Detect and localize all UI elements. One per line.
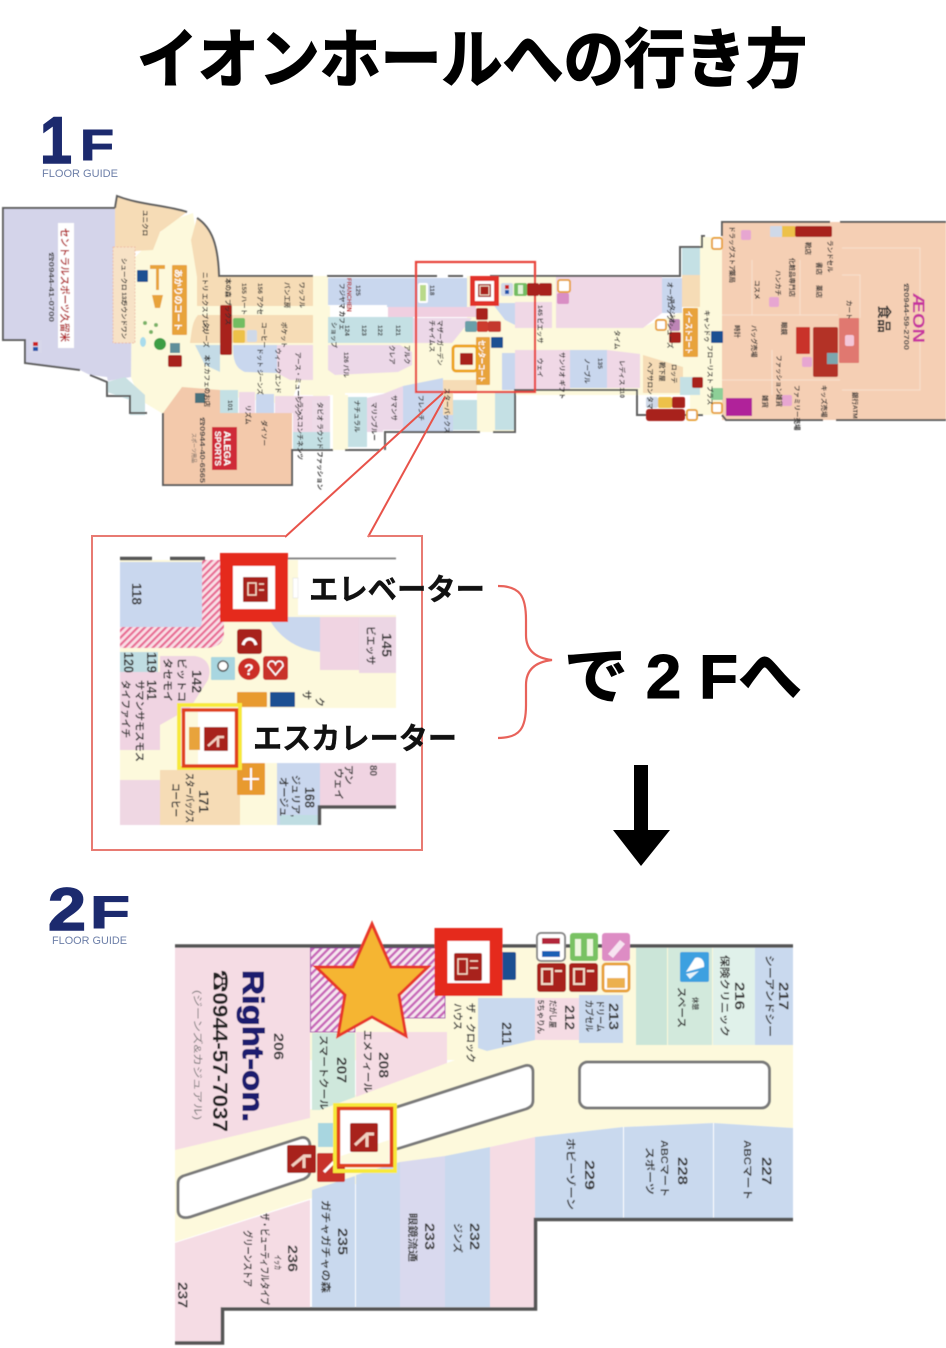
tiny shop labels 1F: 101 [226,400,233,411]
tiny shop labels 1F: ファッション雑貨 [775,355,784,408]
tiny shop labels 1F: 化粧品専門店 [788,258,797,298]
tiny shop labels 1F: 薬局 [728,270,737,284]
shop labels 2F: 237 [175,1282,191,1308]
store: rest space [636,948,793,1045]
shop labels 2F: ザ・クロック [464,1003,476,1063]
icon: escalator 1F [453,346,477,371]
tiny shop labels 1F: キッズ売場 [820,385,829,418]
shop labels 2F: 眼鏡流通 [406,1213,419,1262]
store label: right-on [191,970,287,1132]
star: destination [316,924,428,1036]
corridor base [131,213,722,415]
tiny shop labels 1F: アース・ミュージック [294,352,303,416]
shop labels inset: アン [342,765,354,785]
icon: lower escalator [287,1145,316,1173]
tiny shop labels 1F: レディス 110 [618,360,627,398]
logo: 2F floor guide: 2 [48,876,86,943]
tiny shop labels 1F: ドラッグストア [728,226,737,272]
store: 212 [535,998,579,1040]
shop labels inset: 118 [129,583,145,605]
tiny shop labels 1F: 雑貨 [761,395,770,408]
tiny shop labels 1F: 銀行ATM [851,392,860,419]
walls [175,946,793,1343]
icons: elevator 1F [472,278,496,304]
shop labels inset: 141 [144,680,160,700]
icon: elevator highlight [441,934,496,990]
shop labels 2F: イッカ [273,1255,282,1270]
tiny shop labels 1F: タリーズ [202,322,211,348]
stores: central blocks [328,278,387,305]
icon: heart [263,656,288,680]
logo: 1F floor guide [40,103,118,180]
tiny shop labels 1F: ドット ジーンズ [256,348,265,395]
tiny shop labels 1F: オーガニック シューズ [666,282,675,349]
tiny shop labels 1F: ワッフル [298,282,306,308]
store label: right-on: Right-on. [236,970,269,1122]
shop labels inset: ウェイ [332,768,344,800]
shop labels 2F: ガチャガチャの森 [319,1200,332,1293]
shop labels inset: ビットコ [175,658,188,702]
shop labels 2F: 207 [334,1057,350,1083]
shop labels 2F: ABCマート [741,1140,752,1200]
panel: zoomed inset frame [92,536,422,850]
tiny shop labels 1F: コスメ [753,280,761,300]
map: enlarged 1F elevator and escalator area [119,558,396,825]
label: alega sports: SPORTS [213,431,222,467]
shop labels 2F: エメフィール [361,1030,373,1093]
label: escalator: エスカレーター [253,723,457,756]
shop labels inset: 80 [367,765,378,777]
tiny shop labels 1F: チャイムス [428,320,436,352]
tiny shop labels 1F: フジヤマ カフェ [338,283,346,330]
map: 1F floor plan [3,196,946,491]
icon: escalator highlight [179,705,240,768]
shop labels inset: 145 [379,633,395,657]
icon: telephone [237,629,262,654]
shop labels 2F: 227 [759,1157,775,1185]
logo: 1F floor guide: 1 [40,103,72,177]
tiny shop labels 1F: ロッテ [670,364,678,384]
tiny shop labels 1F: ファミリー売場 [793,385,802,431]
void: atrium right [580,1062,770,1108]
store: alega sports [163,387,292,485]
store: 213 [579,995,623,1043]
logo: 2F floor guide [48,876,130,947]
shop labels 2F: だがし屋 [548,1000,558,1028]
tiny shop labels 1F: 118 [428,285,435,296]
label: aeon food: ☎0944-59-2700 [902,283,909,350]
shop labels inset: タイファイチ [119,680,131,738]
tiny shop labels 1F: サンリオ ギフト [558,352,566,399]
label: center court: センターコート [477,340,487,382]
store label: right-on: (ジーンズ&カジュアル) [191,990,204,1120]
shop labels inset: オージュ [277,777,289,817]
icon: green multipurpose [570,933,598,961]
tiny shop labels 1F: ポケット [280,322,288,348]
shop labels 2F: ホビーゾーン [564,1138,577,1210]
shop labels 2F: ドリーム [595,1000,605,1032]
tiny shop labels 1F: 時計 [733,325,742,338]
tiny shop labels 1F: 薬店 [815,285,824,298]
tiny shop labels 1F: パン工房 [283,282,291,309]
shop labels inset: 142 [189,670,205,693]
label: alega sports: スポーツ用品 [190,433,197,463]
tiny shop labels 1F: FRANCHEN [345,278,351,312]
stores: south row [175,1123,793,1345]
shop labels 2F: 213 [606,1003,622,1030]
shop labels 2F: 保険クリニック [718,955,731,1037]
tiny shop labels 1F: ヘアサロン タマ [646,362,655,410]
corridor [175,1040,793,1242]
title: イオンホールへの行き方 [137,24,807,96]
connector lines to inset [285,393,445,537]
brace [498,586,552,738]
tiny shop labels 1F: 本とカフェのお店 [203,355,212,408]
tiny shop labels 1F: 122 [376,325,383,336]
tiny shop labels 1F: 靴下屋 [658,362,667,382]
highlight: central area box [416,262,535,392]
tiny shop labels 1F: アルク [403,345,412,364]
shop labels inset: タセモイ [161,658,173,702]
tiny shop labels 1F: ラウンドワン [120,300,129,340]
tiny shop labels 1F: 本の森 ブックス [224,278,233,325]
icon: orange service [237,692,267,707]
label tab: orange court [237,763,265,795]
tiny shop labels 1F: ランドセル [826,240,834,273]
store label: central sports: セントラルスポーツ久留米 [58,228,71,342]
shop labels 2F: ハウス [451,1003,463,1030]
tiny shop labels 1F: マザーガーデン [436,320,445,366]
label backgrounds [298,560,396,615]
shop labels 2F: 休憩 [691,997,700,1010]
shop labels 2F: ABCマート [658,1140,669,1197]
shop labels 2F: スペース [675,987,687,1028]
shop labels 2F: カプセル [584,1000,594,1032]
tiny shop labels 1F: ウィークエンド [274,348,283,394]
store: 207 [312,1033,355,1110]
tiny shop labels 1F: マリンブルー [370,402,379,441]
icon: red service [317,1153,345,1182]
shop labels 2F: 211 [499,1022,515,1045]
shop labels inset: サ [300,690,312,700]
tiny shop labels 1F: 155 ハート [240,283,247,315]
store: aeon [722,222,946,420]
tiny shop labels 1F: トランスコンチネンツ [296,395,304,460]
shop labels 2F: 232 [467,1223,483,1250]
tiny shop labels 1F: クレア [388,345,397,365]
tiny shop labels 1F: 眼鏡 [780,322,789,336]
tiny shop labels 1F: カート [845,300,853,320]
shop labels 2F: 235 [335,1228,351,1255]
void: atrium left [178,1137,310,1218]
label: elevator: エレベーター [309,574,485,607]
tiny shop labels 1F: 123 [360,325,367,336]
tiny shop labels 1F: キャンドゥ [703,310,710,342]
walls [3,196,946,485]
icon: ice cream [680,952,709,982]
tiny shop labels 1F: フローリスト プラス [706,345,714,405]
store: hatched event hall [310,948,445,1032]
tiny shop labels 1F: 145 ビエッサ [536,305,545,344]
tiny shop labels 1F: ダイソー [260,420,269,446]
icon: wifi [270,692,295,707]
icon: information [238,658,260,680]
icon: west court figure [140,265,166,350]
tiny shop labels 1F: シュークロ 132 [120,258,129,304]
shop labels inset: サマンサモスモス [133,680,145,762]
icon: orange guide [603,964,629,991]
tiny shop labels 1F: ナチュラル [353,400,361,433]
logo: 1F floor guide: F [80,121,114,170]
shop labels inset: 119 [144,652,160,673]
tiny shop labels 1F: コーヒー [260,322,268,348]
void: atrium centre [338,1065,533,1166]
icons: service icons 1F [29,226,859,421]
shop labels inset: コーヒー [169,783,181,817]
tiny shop labels 1F: サマンサ [390,395,398,422]
shop labels 2F: 236 [285,1245,301,1272]
tiny shop labels 1F: ノーブル [583,358,592,384]
shop labels 2F: ジンズ [451,1223,464,1253]
label: center court [476,337,490,385]
label: alega sports: ☎0944-40-6565 [198,417,205,483]
shop labels 2F: ザ・ビューティフルタイプ [258,1213,271,1305]
shop labels 2F [175,955,792,1308]
tiny shop labels 1F: スターバックス [443,388,452,433]
label: orange west court: あかりのコート [173,269,183,331]
tiny shop labels 1F: 124 [343,325,350,336]
arrow: down [613,765,670,866]
label: east court [683,308,698,357]
shop labels 2F: 217 [776,982,792,1010]
tiny shop labels 1F: 靴店 [804,242,813,256]
tiny shop labels 1F: スタジオ [668,298,677,324]
tiny shop labels 1F: ニトリ エクスプレス [201,272,210,332]
shop labels inset: 171 [196,790,212,813]
tiny shop labels 1F: 126 パル [342,352,350,378]
walls [120,557,205,560]
icon: restroom [537,933,565,961]
store: 206 right-on [175,948,310,1150]
tiny shop labels 1F: ユニクロ [141,210,150,236]
store label: central sports: ☎0944-41-0700 [47,252,54,322]
icon: blue accessible [500,952,516,980]
tiny shop labels 1F: リズム [244,405,253,425]
icon: lockers [537,963,598,992]
logo: 2F floor guide: F [90,887,130,938]
tiny shop labels 1F: 156 アクセ [256,283,265,315]
store label: right-on: ☎0944-57-7037 [208,970,231,1132]
icon: elevator highlight [226,560,298,616]
store: central sports west [3,208,132,381]
shop labels 2F: 228 [675,1157,691,1185]
icon: baby [211,657,235,680]
shop labels 2F: 229 [582,1160,598,1190]
shop labels 2F: シーアンドシー [763,955,775,1037]
shop labels inset: ジュリア, [289,775,301,817]
tiny shop labels 1F: バッグ売場 [750,325,759,358]
shop labels 2F: 5ちゃりん [536,1000,546,1034]
shop labels inset [119,583,395,823]
label: orange west court [172,265,187,335]
shop labels 2F: グリーンストア [241,1230,254,1287]
label: aeon food [876,283,928,350]
tiny shop labels 1F: 125 [354,285,361,296]
shop labels 2F: 212 [562,1005,578,1030]
tiny shop labels 1F: 135 [596,358,603,369]
label: alega sports: ALEGA [222,431,232,467]
tiny shop labels 1F [120,210,860,491]
tiny shop labels 1F: タイム [613,330,622,350]
store label: central sports [47,223,74,348]
shop labels inset: スターバックス [183,773,195,823]
tiny shop labels 1F: ハンカチ [774,270,782,296]
label: east court: イーストコート [684,311,693,354]
icon: nursing bottle [602,933,630,961]
tiny shop labels 1F: ウェイ [536,358,545,378]
logo: 1F floor guide: FLOOR GUIDE [42,168,118,180]
icon: information: ? [244,662,254,679]
shop labels 2F: 233 [422,1223,438,1250]
label: aeon food: ÆON [909,293,928,343]
store: 211 [478,998,535,1051]
map: 2F floor plan [175,924,793,1345]
shop labels 2F: スポーツ [643,1147,655,1195]
shop labels 2F: 216 [732,982,748,1010]
instruction: to 2F: で 2 Fへ [564,643,802,712]
shop labels inset: ク [313,697,325,707]
store: tan north west [115,196,187,252]
label: aeon food: 食品 [876,305,892,333]
tiny shop labels 1F: フレンチ [417,395,425,422]
shop labels 2F: 208 [376,1052,392,1078]
store: 208 [356,1032,447,1097]
tiny shop labels 1F: 書店 [815,262,824,276]
shop labels inset: ビエッサ [364,626,377,665]
icon: escalator highlight [335,1105,395,1171]
tiny shop labels 1F: ショップ [330,322,338,348]
store label: right-on: 206 [271,1033,287,1060]
tiny shop labels 1F: タビオ ラウンド ファッション [316,402,325,491]
label: alega sports [190,417,237,483]
logo: 2F floor guide: FLOOR GUIDE [52,935,127,947]
icon: teal baby [318,1123,333,1147]
shop labels inset: 168 [302,787,318,808]
shop labels 2F: スマートクール [317,1035,329,1110]
shop labels inset: 120 [121,652,137,673]
tiny shop labels 1F: 121 [394,325,401,336]
